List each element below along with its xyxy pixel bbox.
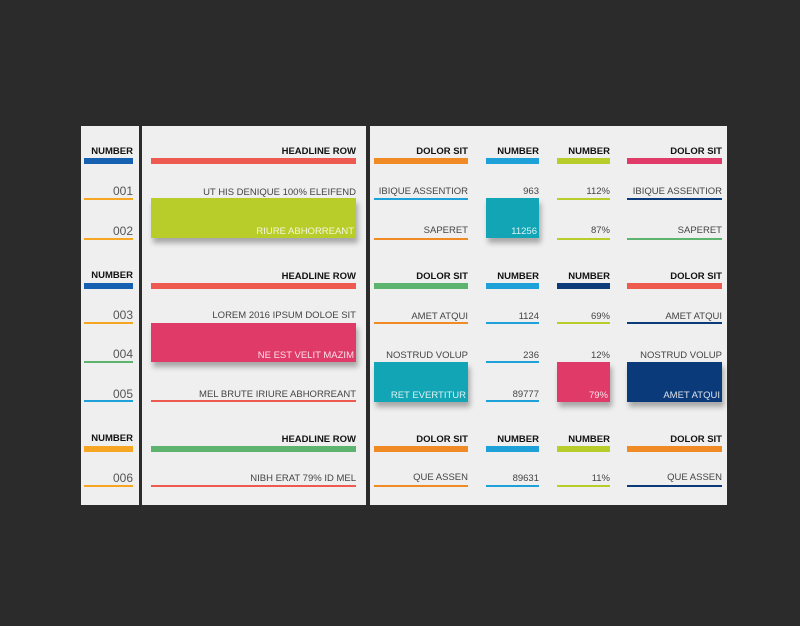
column 1: dolor sit: IBIQUE ASSENTIOR	[379, 186, 468, 197]
column 1: dolor sit: DOLOR SIT	[416, 146, 468, 157]
column 3: number percent	[556, 146, 615, 487]
column 2: number: NUMBER	[497, 434, 539, 445]
column 3: number percent: 87%	[591, 225, 610, 236]
block: green	[151, 198, 356, 238]
column 3: number percent: 69%	[591, 311, 610, 322]
column 4: dolor sit: AMET ATQUI	[663, 390, 720, 401]
column 1: dolor sit: SAPERET	[424, 225, 468, 236]
row 004: 004	[113, 347, 133, 361]
text row 5: MEL BRUTE IRIURE ABHORREANT	[199, 389, 356, 400]
column 1: dolor sit: NOSTRUD VOLUP	[386, 350, 468, 361]
block: pink	[151, 323, 356, 362]
column 1: dolor sit: QUE ASSEN	[413, 472, 468, 483]
row 006: 006	[113, 471, 133, 485]
block: green: RIURE ABHORREANT	[256, 226, 354, 237]
row 003: 003	[113, 308, 133, 322]
column 2: number: NUMBER	[497, 271, 539, 282]
column 2: number: 89631	[513, 473, 539, 484]
column 2: number: 963	[523, 186, 539, 197]
column 4: dolor sit: SAPERET	[678, 225, 722, 236]
column 3: number percent: NUMBER	[568, 434, 610, 445]
column 1: dolor sit: AMET ATQUI	[411, 311, 468, 322]
column 3: number percent: NUMBER	[568, 146, 610, 157]
text row 3: LOREM 2016 IPSUM DOLOE SIT	[212, 310, 356, 321]
column 2: number: 89777	[513, 389, 539, 400]
column 4: dolor sit: DOLOR SIT	[670, 271, 722, 282]
column 4: dolor sit: IBIQUE ASSENTIOR	[633, 186, 722, 197]
row 005: 005	[113, 387, 133, 401]
text row 6: NIBH ERAT 79% ID MEL	[250, 473, 356, 484]
column 2: number: 11256	[511, 226, 537, 237]
column 1: dolor sit	[373, 146, 473, 487]
column 4: dolor sit: QUE ASSEN	[667, 472, 722, 483]
header: headline row 1: HEADLINE ROW	[282, 146, 356, 157]
row 002: 002	[113, 224, 133, 238]
column 4: dolor sit	[626, 146, 727, 487]
column 3: number percent: 79%	[589, 390, 608, 401]
header: headline row 2: HEADLINE ROW	[282, 271, 356, 282]
column 3: number percent: NUMBER	[568, 271, 610, 282]
row 001: 001	[113, 184, 133, 198]
header: number 1: NUMBER	[91, 146, 133, 157]
panel: data columns	[370, 126, 727, 505]
block: pink: NE EST VELIT MAZIM	[258, 350, 354, 361]
column 2: number: 1124	[519, 311, 539, 322]
text row 1: UT HIS DENIQUE 100% ELEIFEND	[203, 187, 356, 198]
column 3: number percent: 12%	[591, 350, 610, 361]
column 4: dolor sit: DOLOR SIT	[670, 434, 722, 445]
column 3: number percent: 11%	[592, 473, 610, 484]
column 4: dolor sit: NOSTRUD VOLUP	[640, 350, 722, 361]
panel: number column	[81, 126, 139, 505]
header: number 2: NUMBER	[91, 270, 133, 281]
column 2: number: NUMBER	[497, 146, 539, 157]
column 3: number percent: 112%	[586, 186, 610, 197]
column 1: dolor sit: RET EVERTITUR	[391, 390, 466, 401]
column 4: dolor sit: AMET ATQUI	[665, 311, 722, 322]
panel: headline column	[142, 126, 366, 505]
column 1: dolor sit: DOLOR SIT	[416, 271, 468, 282]
column 2: number: 236	[523, 350, 539, 361]
column 1: dolor sit: DOLOR SIT	[416, 434, 468, 445]
column 4: dolor sit: DOLOR SIT	[670, 146, 722, 157]
column 2: number	[485, 146, 544, 487]
header: headline row 3: HEADLINE ROW	[282, 434, 356, 445]
header: number 3: NUMBER	[91, 433, 133, 444]
